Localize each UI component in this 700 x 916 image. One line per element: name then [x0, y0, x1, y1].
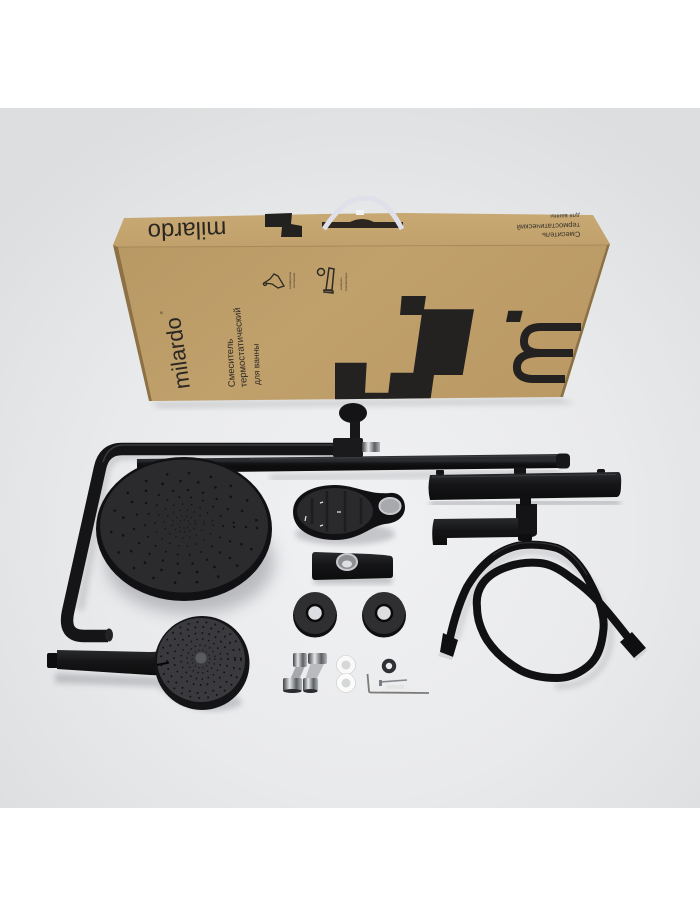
chrome adapters	[283, 653, 327, 693]
flap product name: термостатический	[517, 221, 580, 232]
hose end right	[620, 632, 646, 658]
box top flap	[113, 213, 610, 249]
flange 1	[293, 592, 337, 638]
washer 1	[336, 656, 356, 674]
box edge left	[113, 245, 152, 401]
thermostat mixer	[428, 467, 621, 545]
hex key	[368, 674, 429, 693]
box edge right	[560, 244, 610, 397]
head shadow	[106, 510, 274, 614]
rain shower head	[96, 457, 274, 614]
box front face	[118, 245, 607, 401]
front product name: термостатический	[232, 307, 250, 388]
adapter 1	[283, 653, 307, 693]
slider shadow	[314, 576, 392, 584]
screw	[380, 680, 407, 682]
pipe tube	[67, 449, 335, 636]
slider body	[312, 552, 393, 580]
slider	[312, 552, 393, 584]
mixer outlet column	[516, 504, 537, 537]
hose tube	[447, 545, 630, 678]
head face	[157, 618, 245, 702]
dish body	[293, 485, 405, 540]
sliding rail	[137, 454, 570, 478]
black pixel shape on flap	[265, 213, 302, 237]
logo dot	[506, 311, 523, 322]
translucent ring	[380, 498, 400, 514]
thermostat caption	[339, 273, 348, 291]
icon: thermostat	[318, 268, 334, 293]
hose end left	[440, 633, 458, 657]
pipe highlight	[103, 445, 335, 462]
anchor	[386, 685, 404, 689]
center button	[196, 652, 206, 664]
hose shadow	[456, 551, 610, 686]
wall flanges	[293, 592, 406, 638]
adapter 2	[303, 653, 327, 693]
handle	[57, 650, 162, 676]
mixer highlight	[432, 474, 616, 477]
handle clip	[356, 210, 364, 215]
bracket clamp	[333, 438, 363, 457]
photo background	[0, 108, 700, 808]
mixer bumps	[436, 467, 605, 475]
hose end right face	[634, 648, 647, 661]
rubber washer	[384, 661, 394, 671]
hose connector	[47, 653, 58, 668]
flap product name: для ванны	[550, 212, 580, 219]
front product name: Смеситель	[224, 338, 238, 387]
box shadow	[150, 398, 575, 408]
head face	[100, 460, 268, 592]
dish slots	[305, 502, 341, 526]
dish shadow	[295, 523, 395, 545]
flap logo: milardo	[147, 215, 227, 245]
flap product name: Смеситель	[542, 230, 580, 240]
cardboard box	[113, 198, 610, 408]
large m logo	[517, 327, 581, 379]
mode mark	[157, 662, 169, 665]
flap product name	[516, 212, 580, 241]
pipe end cap	[105, 628, 113, 642]
hose end left face	[438, 652, 453, 660]
nozzles	[161, 622, 241, 698]
hands caption: комфортное	[288, 271, 292, 289]
large pixel graphic	[335, 296, 474, 399]
chrome end	[362, 442, 380, 452]
pipe shadow	[80, 455, 334, 610]
spout foot	[518, 534, 532, 541]
rail tube	[137, 461, 562, 466]
washer 2	[336, 674, 356, 692]
shower hose	[438, 543, 647, 686]
wall bracket	[333, 403, 380, 457]
bracket stem	[350, 421, 360, 439]
screw head	[379, 680, 382, 686]
soap dish	[293, 485, 405, 545]
registered mark: ®	[159, 311, 164, 315]
rail end cap	[556, 454, 570, 468]
hands caption	[288, 271, 296, 289]
rain shower pipe with bend	[67, 445, 335, 642]
nozzles	[111, 473, 257, 583]
translucent ring	[337, 554, 357, 570]
dish tray	[297, 488, 373, 534]
rail highlight	[250, 456, 560, 459]
mixer shadow	[430, 502, 620, 504]
thermostat caption: температуры	[344, 273, 348, 291]
hose sheen	[493, 543, 587, 575]
icon: hands	[264, 274, 284, 288]
flap fold	[118, 245, 607, 247]
front product name: для ванны	[251, 343, 262, 385]
hand shower	[47, 616, 250, 710]
hands caption: положение	[292, 272, 296, 288]
column neck	[520, 496, 531, 506]
plastic handle	[324, 198, 402, 229]
bracket knob	[339, 403, 367, 423]
head rim	[96, 457, 272, 601]
dish ribs	[312, 491, 361, 532]
thermostat caption: контроль	[339, 277, 343, 290]
front logo: milardo	[160, 316, 195, 391]
head rim	[154, 616, 250, 710]
white washers	[336, 656, 356, 692]
handle slot	[322, 219, 403, 228]
rail shadow	[270, 472, 560, 478]
ring centre	[342, 560, 352, 568]
hand shower shadow	[55, 678, 240, 706]
flange 2	[362, 592, 406, 638]
screw and anchor	[379, 680, 407, 689]
mixer body	[428, 472, 621, 500]
front product name	[224, 307, 262, 388]
spout	[432, 518, 518, 545]
